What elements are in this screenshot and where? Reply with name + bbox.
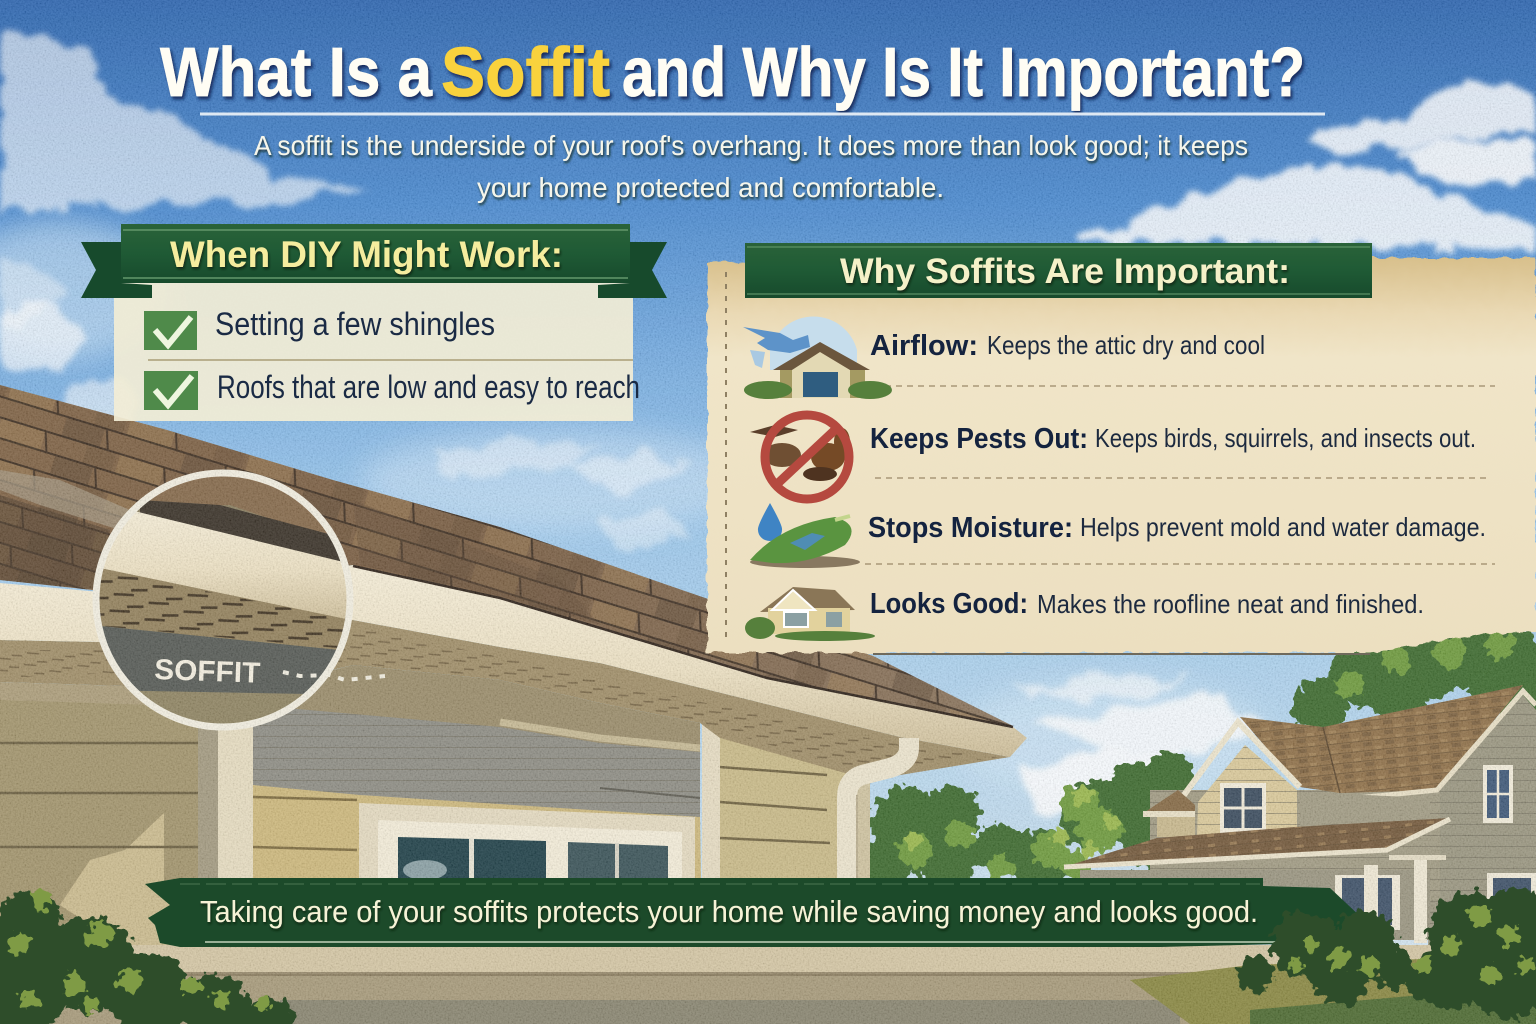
check item 1: Setting a few shingles xyxy=(215,306,495,342)
why heading text: Why Soffits Are Important: xyxy=(840,252,1290,291)
row: stops moisture: Helps prevent mold and water damage. xyxy=(1080,512,1486,542)
moisture text: Stops Moisture: xyxy=(868,512,1073,544)
row: stops moisture xyxy=(750,503,1486,568)
why heading highlight lines xyxy=(747,247,1370,294)
row: keeps pests out xyxy=(750,415,1476,499)
main house: roof drip edge xyxy=(353,566,1013,727)
right house: upper window xyxy=(1483,765,1513,823)
main house: soffit underside xyxy=(0,620,1010,780)
main house: window xyxy=(359,803,695,945)
row: looks good xyxy=(745,587,1424,641)
trees behind right house xyxy=(864,611,1536,890)
main house: fascia xyxy=(0,565,1027,757)
parchment bottom edge xyxy=(873,653,1370,655)
banner text: Taking care of your soffits protects your home while saving money and looks good. xyxy=(200,894,1258,929)
main house: right wall siding xyxy=(720,733,870,945)
main house: shaded board under soffit xyxy=(253,665,700,760)
main house: columns xyxy=(198,700,720,945)
right house: lower roof xyxy=(1064,818,1450,867)
row: keeps pests out: Keeps birds, squirrels, and insects out. xyxy=(1095,423,1476,453)
parchment dashed margin xyxy=(725,272,727,640)
panel: why soffits are important xyxy=(707,243,1536,654)
lens: shadow under roof xyxy=(140,500,345,566)
soffit label: SOFFIT xyxy=(154,654,261,690)
main house: grey upper wall xyxy=(253,705,700,817)
icon: airflow house xyxy=(743,317,892,399)
main house xyxy=(0,385,1027,945)
subtitle: your home protected and comfortable. xyxy=(477,172,944,203)
main house: wall corner strip xyxy=(857,775,870,945)
title underline xyxy=(200,112,1325,116)
DIY list background xyxy=(114,283,633,421)
lens: lower shaded board xyxy=(102,626,336,694)
lens: magnified fascia xyxy=(104,512,346,619)
right house: grey siding wall xyxy=(1150,695,1536,945)
lens: vented soffit xyxy=(104,568,345,619)
clouds xyxy=(0,35,1536,810)
main house: gutter downspout xyxy=(847,738,909,945)
ground driveway xyxy=(0,945,1536,1024)
icon: water drop and leaf xyxy=(750,503,860,568)
row: looks good: Makes the roofline neat and finished. xyxy=(1037,589,1424,619)
DIY list divider xyxy=(148,359,633,361)
bushes xyxy=(0,887,1536,1024)
row: airflow: Keeps the attic dry and cool xyxy=(987,330,1265,360)
main house: middle wall siding xyxy=(253,780,702,945)
soffit pointer dots xyxy=(283,672,385,680)
title xyxy=(160,33,1305,111)
airflow text: Airflow: xyxy=(870,330,978,362)
icon: pests prohibited xyxy=(750,415,850,499)
row dividers xyxy=(865,386,1495,564)
pests text: Keeps Pests Out: xyxy=(870,423,1088,455)
check item 1 xyxy=(144,306,495,350)
magnifier lens xyxy=(90,470,385,730)
title: Soffit xyxy=(441,33,610,111)
looks good text: Looks Good: xyxy=(870,588,1028,620)
right house: eave trim xyxy=(1326,691,1536,801)
lens: shingles xyxy=(150,476,327,534)
parchment background xyxy=(707,258,1536,653)
panel: when DIY might work xyxy=(81,224,667,421)
DIY heading text: When DIY Might Work: xyxy=(170,234,563,275)
subtitle: A soffit is the underside of your roof's overhang. It does more than look good; it keeps xyxy=(254,130,1248,161)
main house: left wall siding xyxy=(0,695,200,945)
subtitle xyxy=(254,130,1248,203)
right house: porch and windows xyxy=(1080,855,1536,943)
main house: left trim board xyxy=(0,682,250,708)
right house xyxy=(1064,685,1536,945)
check item 2 xyxy=(144,369,640,410)
title: What Is a xyxy=(160,33,433,111)
bottom banner xyxy=(145,878,1362,947)
soft sky glow xyxy=(0,220,1270,800)
icon: neat house xyxy=(745,587,875,641)
check item 2: Roofs that are low and easy to reach xyxy=(217,369,640,405)
title: and Why Is It Important? xyxy=(622,33,1305,111)
main house: roof shingles xyxy=(0,385,1013,726)
ribbon heading xyxy=(121,224,630,283)
why heading ribbon xyxy=(745,243,1372,298)
row: airflow xyxy=(743,317,1265,399)
right house: main roof xyxy=(1240,685,1523,793)
right house: gable xyxy=(1143,722,1300,837)
main house: soffit vents xyxy=(0,627,1000,775)
ribbon tails xyxy=(81,242,667,298)
ribbon highlight lines xyxy=(123,230,628,278)
